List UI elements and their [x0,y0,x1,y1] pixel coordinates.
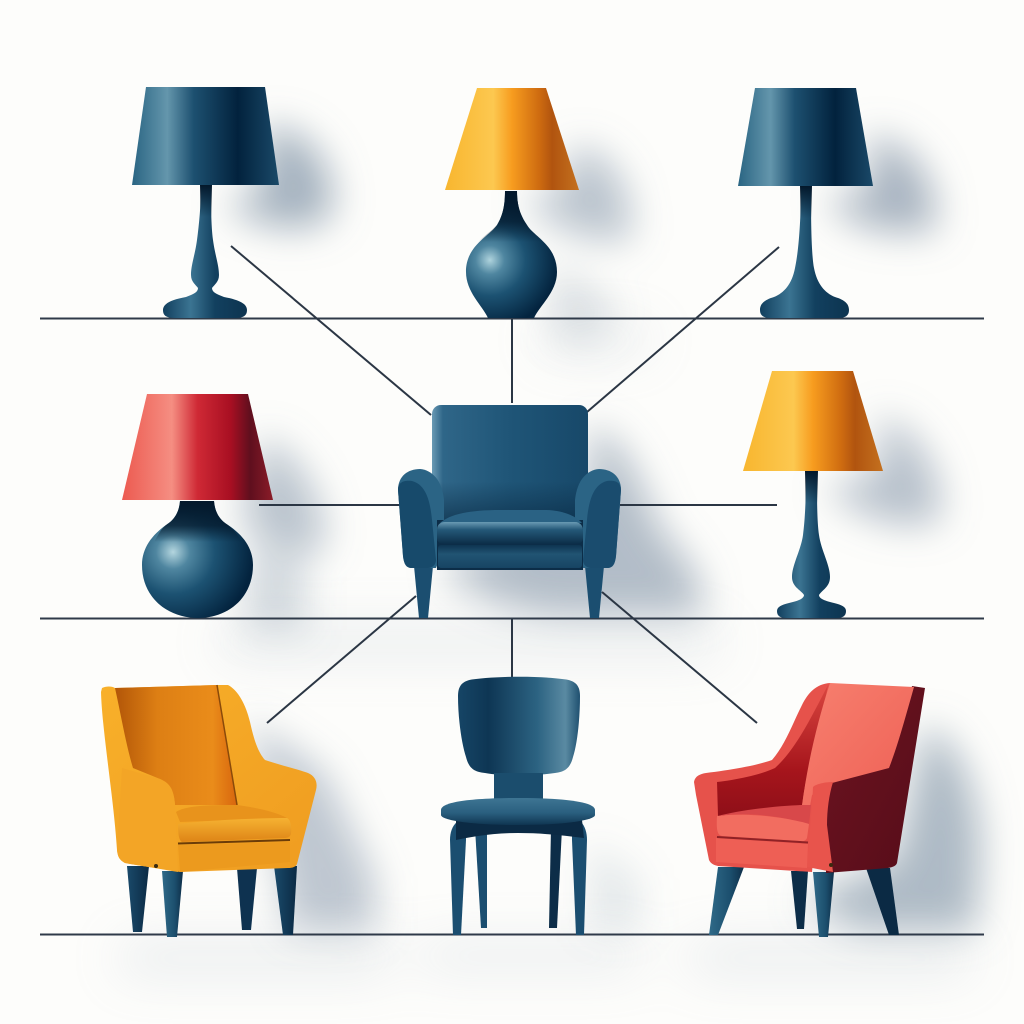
seat top [176,805,287,822]
lamp: top centre yellow [445,88,579,318]
chair: bottom centre navy dining chair [441,677,595,935]
left arm outer [694,683,830,872]
chair: bottom right red armchair [694,683,925,937]
cushion top [440,510,582,523]
seat [441,798,595,825]
cushion front [178,818,291,842]
cushion seam [178,840,290,844]
apron [456,820,584,840]
cast shadows [225,125,981,930]
connector lines [231,246,779,723]
lamp: middle left red with round base [122,394,273,618]
inner wing shading [717,685,828,816]
rivet [829,863,833,867]
front arm strip [807,782,833,872]
back legs [475,828,487,928]
lamp: top left navy [132,87,279,318]
back seam [217,685,237,805]
right arm [575,469,621,568]
seat underlay [437,520,583,570]
back [458,677,580,775]
seat base [716,838,808,868]
chair: bottom left orange armchair [101,685,317,937]
seat base [178,842,290,872]
rivet [154,864,158,868]
cushion front [437,522,583,544]
lamp: top right navy [738,88,873,318]
back [802,683,914,806]
seat base [438,545,582,568]
right dark side [826,686,925,873]
floor shadows [120,330,970,971]
back strut [494,773,543,799]
left arm [398,469,444,568]
seat top [718,805,811,825]
cushion seam [717,837,808,842]
cushion front [717,815,809,841]
body silhouette [101,685,317,872]
legs [127,866,149,932]
front legs [450,822,466,935]
chair: centre navy armchair [398,405,621,618]
shelf lines [40,318,984,934]
back [432,405,588,523]
legs [414,566,433,618]
back inner [115,685,237,805]
left front arm [117,768,178,872]
lamp: middle right yellow [743,371,883,618]
legs [709,867,744,935]
